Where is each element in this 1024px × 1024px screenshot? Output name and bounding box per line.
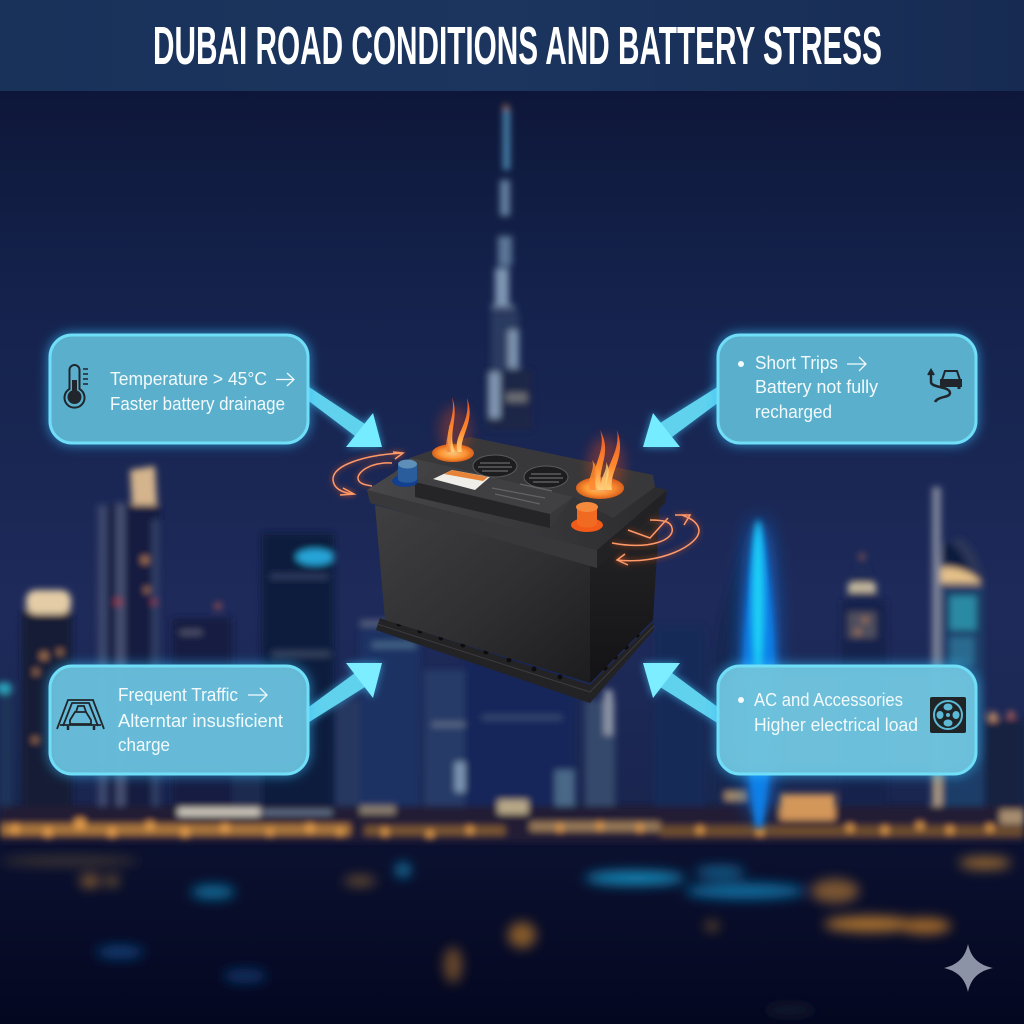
text: temperature: Faster battery drainage — [110, 394, 285, 414]
arrow: temperature to battery — [306, 385, 382, 447]
text: short trips: Battery not fully — [755, 377, 878, 397]
text: AC and accessories: Higher electrical load — [754, 715, 918, 735]
horizon lights — [0, 792, 1024, 842]
panel: short trips — [718, 335, 976, 443]
arrow: short trips to battery — [643, 386, 719, 447]
battery front face — [375, 505, 592, 683]
window lights — [32, 553, 868, 743]
warning label — [433, 470, 490, 490]
battery — [333, 397, 699, 703]
text: short trips — [738, 353, 878, 422]
arrow: frequent traffic to battery — [306, 663, 382, 724]
text: AC and accessories: AC and Accessories — [754, 690, 903, 710]
panel: frequent traffic — [50, 666, 308, 774]
flames — [439, 397, 624, 493]
negative terminal — [392, 460, 418, 487]
blue light beam tower — [743, 518, 775, 827]
text: frequent traffic: Alterntar insusficient — [118, 711, 283, 731]
left skyline towers — [0, 466, 476, 825]
Burj Khalifa tower — [486, 105, 532, 430]
icon: fan — [930, 697, 966, 733]
icon: sparkle watermark — [944, 944, 993, 992]
ground bokeh — [0, 857, 1011, 1014]
battery side face — [590, 503, 660, 683]
icon: car on winding road — [928, 370, 961, 402]
battery lid — [367, 437, 667, 568]
centre and right skyline towers — [465, 487, 1024, 820]
panel: temperature — [50, 335, 308, 443]
text: AC and accessories — [738, 690, 918, 735]
arrow: AC and accessories to battery — [643, 663, 719, 724]
text: frequent traffic: charge — [118, 735, 170, 755]
text: frequent traffic: Frequent Traffic — [118, 685, 238, 705]
text: frequent traffic — [118, 685, 283, 755]
battery base flange — [376, 618, 654, 703]
icon: thermometer — [64, 365, 88, 408]
vent caps — [473, 455, 568, 504]
text: temperature: Temperature > 45°C — [110, 369, 267, 389]
header bar — [0, 0, 1024, 91]
text: short trips: recharged — [755, 402, 832, 422]
heat swirl arrows — [333, 452, 699, 565]
icon: car in traffic lane — [57, 700, 104, 730]
positive terminal — [571, 502, 603, 532]
text: short trips: Short Trips — [755, 353, 838, 373]
text: temperature — [110, 369, 294, 414]
hot spots — [432, 444, 624, 499]
panel: AC and accessories — [718, 666, 976, 774]
